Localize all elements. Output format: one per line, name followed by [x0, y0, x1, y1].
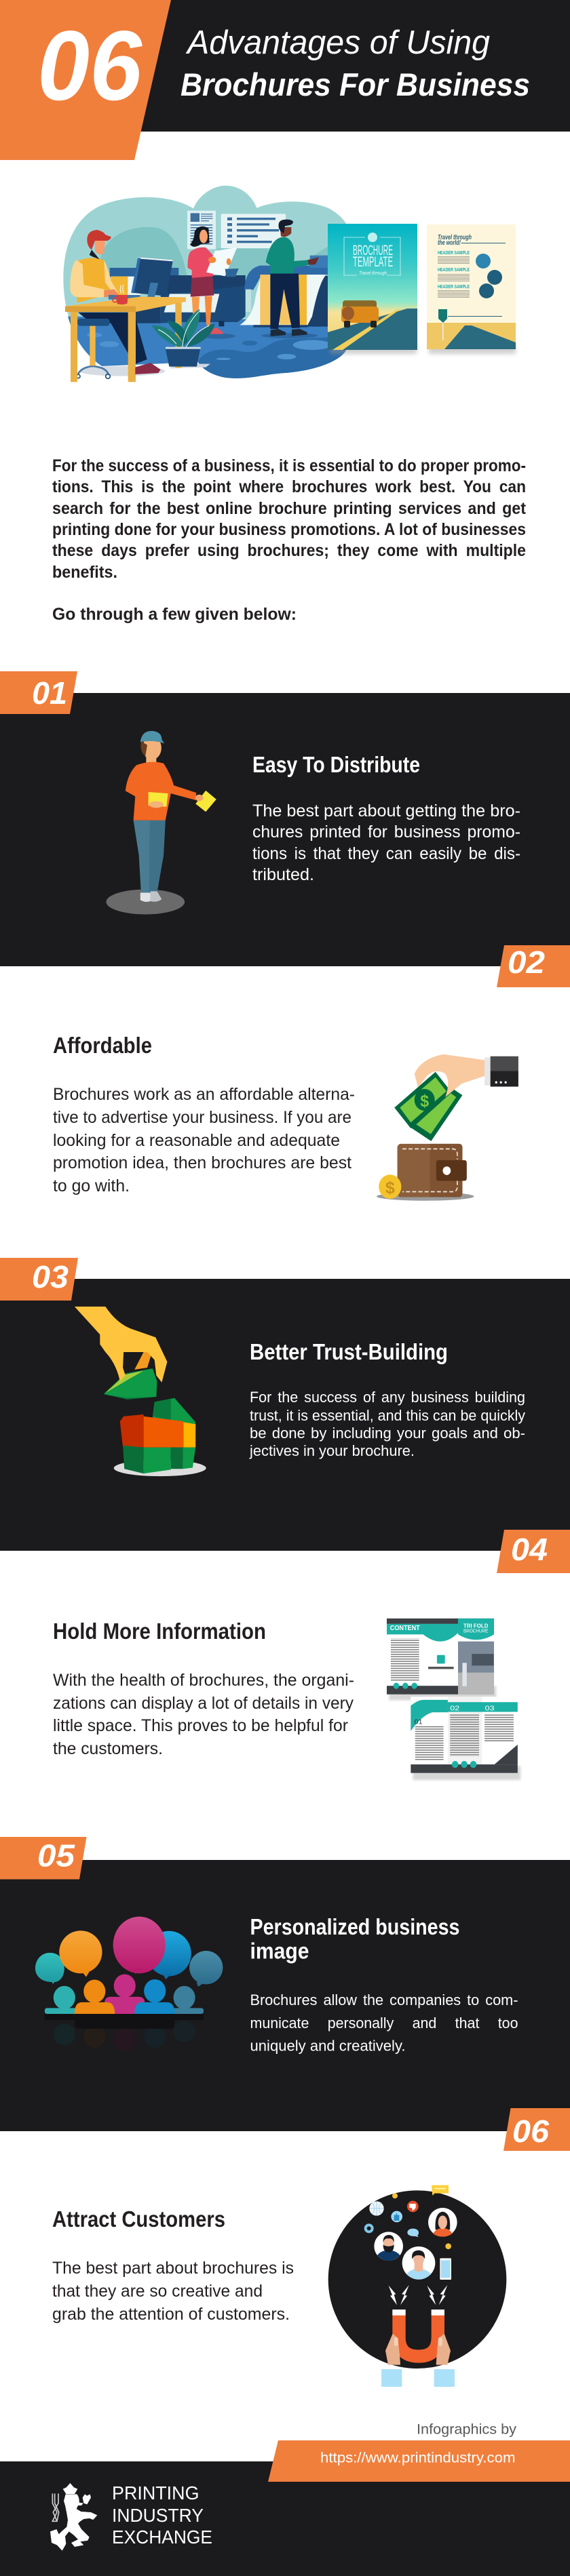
- back printer: [110, 268, 246, 326]
- body text: that they are so creative and: [52, 2282, 263, 2301]
- icon: person handing out flyers: [106, 731, 216, 915]
- header banner: [0, 0, 570, 160]
- large format printer: [240, 256, 328, 328]
- body text: [249, 1389, 525, 1459]
- horseshoe magnet: [392, 2310, 444, 2356]
- tag number 03: 03: [32, 1259, 69, 1294]
- intro paragraph: [52, 456, 527, 624]
- tag number 01: 01: [32, 675, 67, 711]
- hands: [381, 2334, 455, 2387]
- brochure template cover: BROCHURE: [353, 243, 393, 258]
- intro paragraph: search for the best online brochure printing services and get: [52, 499, 527, 518]
- wall posters: [187, 211, 286, 249]
- section 02: affordable: [53, 945, 570, 1201]
- body text: With the health of brochures, the organi-: [53, 1671, 354, 1690]
- heading: Easy To Distribute: [252, 752, 420, 777]
- inside page title two: the world!: [438, 239, 461, 247]
- tag number 05: 05: [37, 1838, 76, 1873]
- logo wordmark: [112, 2482, 212, 2548]
- body text: uniquely and creatively.: [250, 2038, 406, 2055]
- title line two: Brochures For Business: [180, 66, 530, 102]
- front panel: [387, 1619, 494, 1695]
- section 05: personalized business image: [0, 1837, 570, 2131]
- icon: magnet attracting customers: [328, 2185, 506, 2387]
- body text: trust, it is essential, and this can be quickly: [250, 1407, 525, 1424]
- icon: hand putting money in wallet: $: [420, 1092, 430, 1111]
- intro paragraph: tions. This is the point where brochures work best. You can: [52, 477, 526, 496]
- body text: municate personally and that too: [250, 2015, 518, 2032]
- body text: be done by including your goals and ob-: [250, 1425, 525, 1442]
- body text: tive to advertise your business. If you are: [53, 1108, 352, 1127]
- seated man at desk: [65, 230, 186, 382]
- body text: tions is that they can easily be dis-: [252, 844, 520, 863]
- icon: people with speech bubbles: [35, 1917, 223, 2051]
- icon: hand putting money in wallet: [377, 1054, 518, 1201]
- inside page headers: HEADER SAMPLE: [438, 268, 470, 273]
- tag 01: [0, 671, 77, 714]
- intro paragraph: benefits.: [52, 563, 117, 582]
- body text: [252, 801, 520, 884]
- icon: tri-fold brochure mockups: [387, 1619, 520, 1780]
- body text: the customers.: [53, 1739, 163, 1758]
- icon: hand putting money in wallet: $: [385, 1178, 395, 1197]
- intro paragraph: printing done for your business promotions. A lot of businesses: [52, 520, 526, 539]
- tag 05: [0, 1837, 87, 1880]
- section 01: easy to distribute: [0, 671, 570, 966]
- inner panel: [411, 1697, 518, 1773]
- icon: hand placing building bricks: [75, 1307, 206, 1476]
- man at printer: [266, 220, 319, 336]
- avatar: woman: [428, 2208, 457, 2237]
- logo wordmark: PRINTING: [112, 2482, 200, 2503]
- potted plant: [152, 309, 215, 367]
- inner panel: 01: [415, 1718, 423, 1726]
- front panel: CONTENT: [390, 1624, 420, 1631]
- heading: Personalized business: [250, 1914, 460, 1939]
- tag 04: [497, 1530, 570, 1573]
- hero illustration: print shop team: [63, 186, 346, 382]
- heading: image: [250, 1938, 309, 1964]
- inside page headers: HEADER SAMPLE: [438, 251, 470, 256]
- inside page headers: [438, 251, 470, 290]
- brochure cover caption: Travel through: [359, 271, 387, 276]
- url ribbon: [268, 2440, 570, 2482]
- lightning bolts: [389, 2285, 447, 2305]
- body text: grab the attention of customers.: [52, 2305, 290, 2324]
- url text: https://www.printindustry.com: [320, 2451, 516, 2465]
- body text: to go with.: [53, 1176, 130, 1195]
- body text: Brochures work as an affordable alterna-: [53, 1085, 355, 1104]
- brochure template cover: [328, 224, 417, 354]
- body text: The best part about brochures is: [52, 2259, 294, 2278]
- body text: promotion idea, then brochures are best: [53, 1153, 352, 1172]
- intro paragraph: these days prefer using brochures; they come with multiple: [52, 541, 526, 560]
- heading: Better Trust-Building: [250, 1339, 448, 1364]
- heading: [250, 1914, 460, 1964]
- inner panel: 02: [450, 1705, 460, 1712]
- body text: zations can display a lot of details in very: [53, 1694, 354, 1713]
- body text: looking for a reasonable and adequate: [53, 1131, 340, 1150]
- intro lead-in line: Go through a few given below:: [52, 605, 297, 624]
- social icons: [364, 2185, 451, 2280]
- body text: Brochures allow the companies to com-: [250, 1992, 518, 2008]
- tag number 04: 04: [511, 1532, 548, 1567]
- header orange number block: [0, 0, 171, 160]
- avatar: young man: [402, 2246, 435, 2280]
- section 04: hold more information: [53, 1530, 570, 1780]
- avatar: bearded man: [374, 2232, 403, 2261]
- header number 06: 06: [37, 10, 142, 121]
- brochure cover title two: TEMPLATE: [353, 254, 393, 270]
- credit label: Infographics by: [417, 2422, 517, 2437]
- tag number 02: 02: [508, 945, 545, 980]
- body text: jectives in your brochure.: [249, 1442, 415, 1459]
- inner panel: 03: [485, 1705, 495, 1712]
- reflections: [45, 2014, 204, 2051]
- heading: Hold More Information: [53, 1619, 266, 1644]
- inside page headers: HEADER SAMPLE: [438, 285, 470, 290]
- body text: The best part about getting the bro-: [252, 801, 520, 820]
- woman with paper: [188, 226, 239, 334]
- body text: [52, 2259, 294, 2324]
- body text: For the success of any business building: [250, 1389, 525, 1406]
- heading: Attract Customers: [52, 2206, 225, 2232]
- logo wordmark: EXCHANGE: [112, 2527, 212, 2548]
- body text: [53, 1085, 355, 1195]
- brochure inside page: [427, 224, 516, 354]
- footer band: [0, 2422, 570, 2576]
- body text: [53, 1671, 354, 1758]
- brochure cover logo: [368, 233, 377, 242]
- title line one: Advantages of Using: [185, 24, 490, 61]
- body text: tributed.: [252, 865, 314, 884]
- brochure cover frame: [344, 237, 400, 275]
- body text: chures printed for business promo-: [252, 823, 520, 841]
- tag 06: [504, 2108, 570, 2151]
- intro paragraph: For the success of a business, it is essential to do proper promo-: [52, 456, 526, 475]
- inside page title: Travel through: [438, 234, 472, 241]
- front panel: TRI FOLD: [463, 1622, 488, 1629]
- body text: little space. This proves to be helpful for: [53, 1716, 348, 1735]
- body text: [250, 1992, 518, 2055]
- section 03: better trust-building: [0, 1258, 570, 1551]
- logo: heraldic lion: [50, 2483, 97, 2551]
- tag number 06: 06: [512, 2114, 549, 2149]
- tag 02: [497, 945, 570, 987]
- section 06: attract customers: [52, 2108, 570, 2387]
- logo wordmark: INDUSTRY: [112, 2505, 204, 2526]
- tag 03: [0, 1258, 78, 1301]
- heading: Affordable: [53, 1033, 152, 1058]
- front panel: BROCHURE: [463, 1627, 489, 1634]
